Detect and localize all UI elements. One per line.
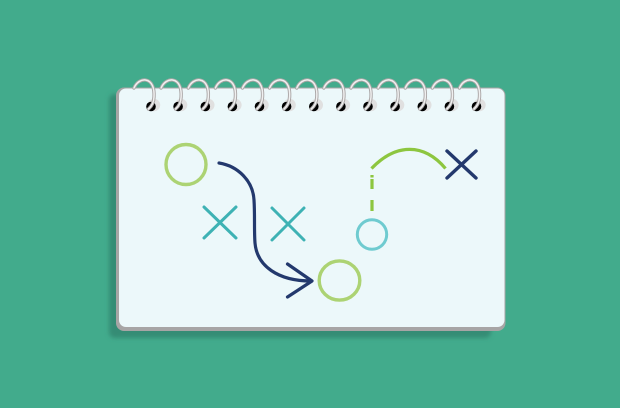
x mark: navy — [447, 151, 476, 178]
arrow: navy curved play — [219, 163, 312, 297]
x mark: teal left — [204, 207, 236, 238]
circle: top left player — [166, 144, 206, 184]
notebook shadow — [109, 94, 491, 338]
spiral binding rings — [134, 80, 486, 111]
arc: green dashed route — [372, 149, 446, 211]
circle: bottom player — [319, 261, 360, 300]
notebook page — [116, 88, 506, 331]
x mark: teal right — [272, 208, 304, 240]
circle: teal player — [357, 220, 387, 249]
